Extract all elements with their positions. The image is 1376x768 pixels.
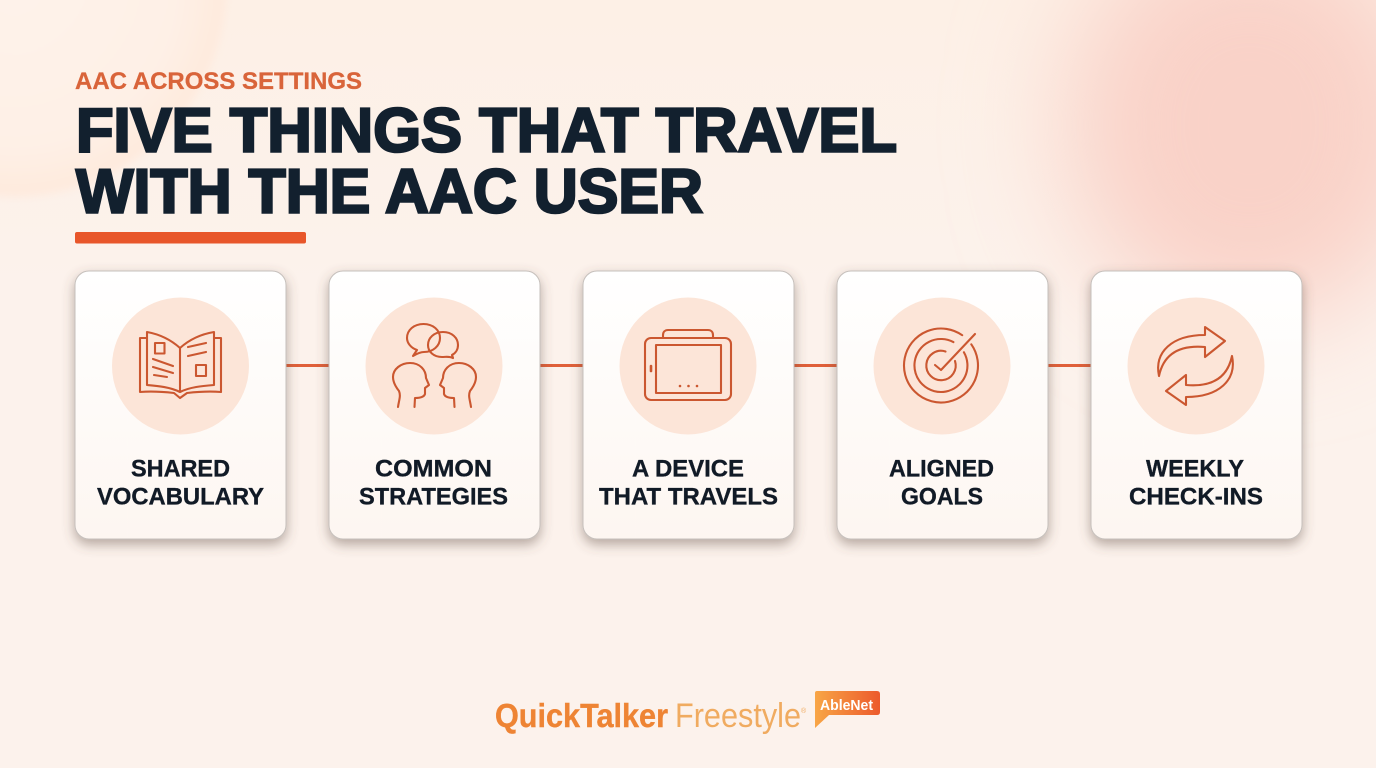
logo: QuickTalker Freestyle: QuickTalker xyxy=(495,697,668,734)
panel: weekly check-ins xyxy=(1091,271,1302,539)
panel: a device that travels xyxy=(583,271,794,539)
icon: tablet device xyxy=(645,330,731,400)
icon: circular arrows xyxy=(1158,327,1233,405)
panel: shared vocabulary xyxy=(75,271,286,539)
logo: QuickTalker Freestyle xyxy=(495,691,880,735)
logo: QuickTalker Freestyle: Freestyle xyxy=(675,697,801,735)
icon: target with check xyxy=(904,329,978,403)
icon: two heads with speech bubbles xyxy=(393,324,476,407)
eyebrow heading: AAC ACROSS SETTINGS xyxy=(75,68,362,95)
label: weekly check-ins: CHECK-INS xyxy=(1129,484,1263,510)
panel: common strategies xyxy=(329,271,540,539)
connector lines xyxy=(286,364,1091,367)
label: shared vocabulary: VOCABULARY xyxy=(97,484,264,510)
title underline xyxy=(75,232,306,244)
label: a device that travels: A DEVICE xyxy=(632,456,744,482)
label: aligned goals: GOALS xyxy=(901,484,983,510)
panel: aligned goals xyxy=(837,271,1048,539)
label: shared vocabulary xyxy=(97,456,264,510)
label: common strategies: STRATEGIES xyxy=(359,484,508,510)
label: common strategies xyxy=(359,456,508,510)
title xyxy=(76,96,897,226)
logo: AbleNet badge: AbleNet xyxy=(820,697,873,714)
icon: open book xyxy=(140,332,221,398)
label: weekly check-ins xyxy=(1129,456,1263,510)
title: WITH THE AAC USER xyxy=(76,158,703,226)
label: a device that travels: THAT TRAVELS xyxy=(599,484,778,510)
label: a device that travels xyxy=(599,456,778,510)
logo: AbleNet badge xyxy=(815,691,880,728)
title: FIVE THINGS THAT TRAVEL xyxy=(76,96,897,166)
label: aligned goals: ALIGNED xyxy=(889,456,994,482)
label: shared vocabulary: SHARED xyxy=(131,456,230,482)
label: aligned goals xyxy=(889,456,994,510)
label: weekly check-ins: WEEKLY xyxy=(1146,456,1244,482)
label: common strategies: COMMON xyxy=(375,456,492,482)
logo: QuickTalker Freestyle: ® xyxy=(801,707,807,715)
